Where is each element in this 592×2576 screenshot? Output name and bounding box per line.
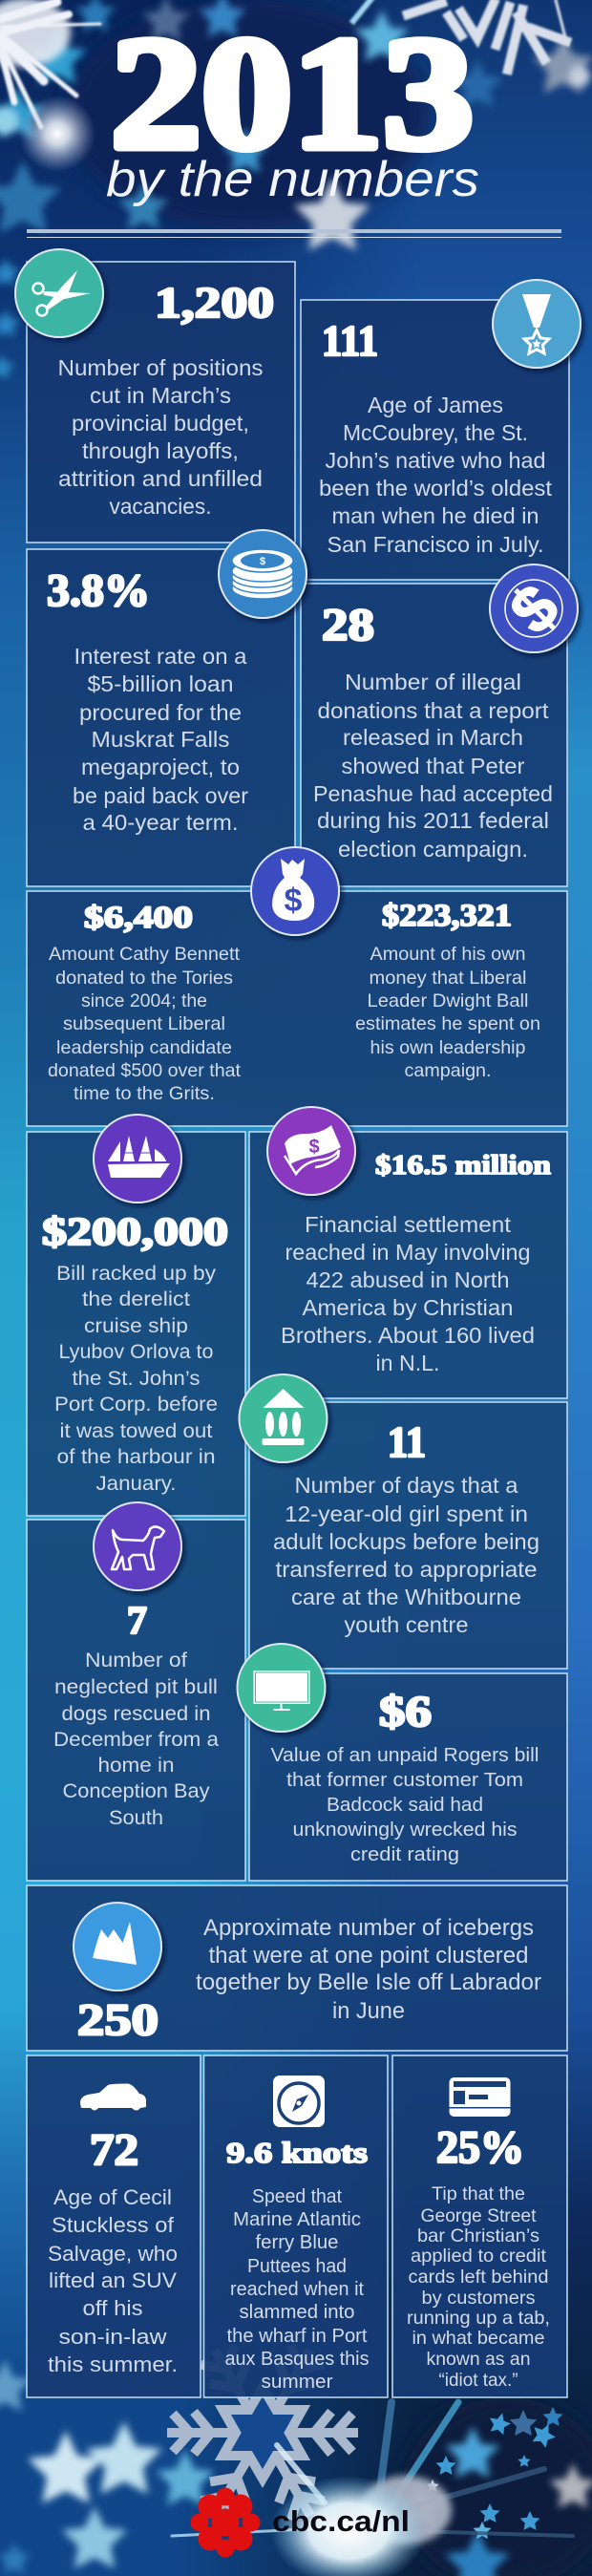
text block xyxy=(313,670,553,862)
icon: medal xyxy=(493,280,581,368)
text block: San Francisco in July. xyxy=(327,532,544,557)
text block: vacancies. xyxy=(109,494,212,519)
icon: snowflake top right xyxy=(353,0,566,70)
text block xyxy=(271,1744,539,1865)
text block: Bennett: leadership candidate xyxy=(56,1037,232,1058)
text block: Number of days that a xyxy=(294,1473,518,1498)
icon: banknotes xyxy=(267,1107,355,1195)
text block: Ball: estimates he spent on xyxy=(355,1013,540,1034)
number: 11: 11 xyxy=(388,1417,426,1466)
number: 72: 72 xyxy=(90,2125,138,2175)
text block xyxy=(273,1473,539,1637)
text block: attrition and unfilled xyxy=(58,466,263,491)
panel: 250 icebergs xyxy=(27,1885,567,2051)
text block: Bennett: subsequent Liberal xyxy=(63,1013,225,1034)
text block xyxy=(57,355,264,519)
icon: television xyxy=(237,1644,325,1732)
icon: courthouse xyxy=(239,1374,327,1462)
text block: Conception Bay xyxy=(63,1779,210,1802)
divider rule xyxy=(27,229,561,238)
text block: Bennett: Amount Cathy Bennett xyxy=(49,944,241,965)
panel: 28 xyxy=(301,584,567,886)
text block xyxy=(407,2183,550,2391)
text block xyxy=(196,1915,541,2024)
subtitle: by the numbers xyxy=(106,152,479,207)
text block: credit rating xyxy=(350,1843,459,1865)
text block: January. xyxy=(95,1473,176,1495)
panel: $6 xyxy=(249,1673,567,1881)
text block: be paid back over xyxy=(73,783,248,808)
text block: Age of Cecil xyxy=(53,2185,172,2209)
text block: in what became xyxy=(412,2328,544,2349)
text block: it was towed out xyxy=(59,1420,213,1442)
number: 25%: 25% xyxy=(436,2122,524,2173)
text block: bar Christian’s xyxy=(417,2225,539,2246)
text block: Bill racked up by xyxy=(56,1263,217,1285)
text block: Ball: money that Liberal xyxy=(369,968,527,989)
text block: of the harbour in xyxy=(57,1446,216,1468)
text block: that former customer Tom xyxy=(286,1769,523,1791)
text block: Speed that xyxy=(252,2186,342,2207)
text block: Lyubov Orlova to xyxy=(59,1341,213,1363)
text block: donations that a report xyxy=(317,698,549,723)
icon: credit card xyxy=(449,2077,510,2117)
number: 1,200: 1,200 xyxy=(155,278,274,327)
text block: McCoubrey, the St. xyxy=(343,420,528,445)
text block: showed that Peter xyxy=(342,754,525,778)
icon: ice burst top left xyxy=(0,0,100,172)
text block: Bennett: donated to the Tories xyxy=(55,968,233,989)
text block: through layoffs, xyxy=(82,438,239,463)
panel: leadership money xyxy=(27,891,567,1126)
text block xyxy=(281,1212,535,1375)
text block: man when he died in xyxy=(332,503,539,528)
text block: Port Corp. before xyxy=(54,1394,218,1416)
text block: Age of James xyxy=(368,393,503,417)
text block: $5-billion loan xyxy=(88,671,233,696)
text block: Bennett xyxy=(48,944,242,1104)
text block: Ball: Amount of his own xyxy=(370,944,525,965)
text block: Bennett: donated $500 over that xyxy=(48,1060,242,1081)
text block: ferry Blue xyxy=(256,2232,338,2253)
text block: Financial settlement xyxy=(305,1212,512,1237)
text block: in June xyxy=(332,1998,405,2024)
text block: running up a tab, xyxy=(407,2308,550,2329)
background stars: top xyxy=(0,0,592,378)
number: $6,400: $6,400 xyxy=(84,901,193,935)
number: $6: $6 xyxy=(379,1687,432,1735)
text block: Marine Atlantic xyxy=(233,2209,361,2230)
number: 3.8%: 3.8% xyxy=(47,565,150,616)
text block: Ball: Leader Dwight Ball xyxy=(367,990,529,1011)
text block: Approximate number of icebergs xyxy=(203,1915,534,1941)
text block: during his 2011 federal xyxy=(317,808,549,833)
text block: Ball: his own leadership xyxy=(370,1037,526,1058)
text block: megaproject, to xyxy=(81,755,240,779)
logo: CBC gem xyxy=(191,2487,260,2558)
text block xyxy=(225,2186,369,2393)
panel: 111 xyxy=(301,300,569,580)
icon: coins xyxy=(219,530,307,618)
text block: in N.L. xyxy=(376,1351,439,1375)
icon: bottom burst xyxy=(172,2402,573,2576)
text block: Stuckless of xyxy=(52,2213,175,2237)
text block: Brothers. About 160 lived xyxy=(281,1323,535,1348)
text block: Number of illegal xyxy=(345,670,521,694)
text block: off his xyxy=(82,2296,143,2320)
text block: together by Belle Isle off Labrador xyxy=(196,1969,541,1995)
text block: cut in March’s xyxy=(90,383,231,408)
text block: George Street xyxy=(420,2205,537,2226)
icon: money bag xyxy=(251,847,339,935)
panel: 72 xyxy=(27,2055,201,2397)
icon: scissors xyxy=(15,249,103,337)
number: $223,321: $223,321 xyxy=(382,899,512,933)
text block: adult lockups before being xyxy=(273,1529,539,1554)
text block: that were at one point clustered xyxy=(208,1943,529,1969)
text block: Tip that the xyxy=(432,2183,525,2204)
icon: small stars bottom right xyxy=(426,2407,562,2539)
text block xyxy=(54,1263,218,1495)
text block: the derelict xyxy=(82,1288,190,1310)
text block: John’s native who had xyxy=(325,448,546,473)
text block: Muskrat Falls xyxy=(92,727,229,752)
text block: Penashue had accepted xyxy=(313,781,553,806)
panel: 9.6 knots xyxy=(204,2055,388,2397)
text block: reached when it xyxy=(230,2279,364,2300)
panel: $200,000 xyxy=(27,1132,245,1516)
text block: 422 abused in North xyxy=(306,1267,510,1292)
text block: this summer. xyxy=(48,2352,178,2376)
text block: the St. John’s xyxy=(73,1368,201,1390)
text block: December from a xyxy=(53,1728,219,1751)
text block: transferred to appropriate xyxy=(275,1557,537,1582)
text block: slammed into xyxy=(239,2302,355,2323)
text block: Bennett: time to the Grits. xyxy=(74,1083,215,1104)
number: 9.6 knots: 9.6 knots xyxy=(226,2136,368,2169)
text block: Number of positions xyxy=(57,355,264,380)
text block: “idiot tax.” xyxy=(439,2370,518,2391)
title: 2013: 2013 xyxy=(111,5,474,182)
panel: 25% xyxy=(392,2055,567,2397)
text block xyxy=(53,1649,219,1829)
text block: by customers xyxy=(422,2288,536,2309)
text block: the wharf in Port xyxy=(227,2326,368,2347)
text block: 12-year-old girl spent in xyxy=(285,1501,528,1526)
text block: son-in-law xyxy=(59,2325,167,2349)
panel: 1,200 positions xyxy=(27,262,295,543)
text block: aux Basques this xyxy=(225,2349,369,2370)
icon: large snowflake bottom xyxy=(167,2339,358,2526)
icon: compass xyxy=(273,2076,325,2127)
number: $200,000: $200,000 xyxy=(42,1209,228,1253)
text block: provincial budget, xyxy=(72,411,249,436)
text block: Ball: campaign. xyxy=(405,1060,491,1081)
text block: election campaign. xyxy=(338,837,528,862)
text block: home in xyxy=(97,1754,174,1777)
panel: 11 days xyxy=(249,1402,567,1669)
text block: neglected pit bull xyxy=(54,1675,218,1698)
text block: Salvage, who xyxy=(48,2242,178,2266)
logo text: cbc.ca/nl xyxy=(272,2504,410,2538)
text block xyxy=(319,393,553,557)
text block: Value of an unpaid Rogers bill xyxy=(271,1744,539,1766)
number: 250: 250 xyxy=(77,1995,159,2045)
text block: youth centre xyxy=(344,1612,468,1637)
panel: 3.8% xyxy=(27,549,295,886)
text block: released in March xyxy=(343,725,523,750)
number: 7: 7 xyxy=(127,1598,147,1642)
text block: summer xyxy=(262,2372,333,2393)
text block: Badcock said had xyxy=(327,1794,483,1816)
title xyxy=(106,5,479,207)
text block: lifted an SUV xyxy=(49,2268,177,2292)
text block: Ball xyxy=(355,944,540,1081)
icon: dollar sign in ring: $ xyxy=(496,570,573,648)
icon: coins: $ xyxy=(260,556,265,567)
text block: Interest rate on a xyxy=(74,644,247,669)
text block: reached in May involving xyxy=(285,1240,531,1265)
panel: $16.5 million xyxy=(249,1132,567,1398)
text block: Puttees had xyxy=(247,2256,347,2277)
text block: a 40-year term. xyxy=(82,810,239,835)
text block xyxy=(73,644,248,835)
text block: cruise ship xyxy=(84,1315,188,1337)
text block: been the world’s oldest xyxy=(319,476,553,500)
icon: banknotes: $ xyxy=(308,1137,320,1158)
text block: Bennett: since 2004; the xyxy=(81,990,207,1011)
icon: money bag: $ xyxy=(285,883,303,919)
text block xyxy=(48,2185,178,2376)
text block: applied to credit xyxy=(411,2246,547,2267)
text block: unknowingly wrecked his xyxy=(292,1819,518,1841)
number: $16.5 million: $16.5 million xyxy=(375,1150,551,1181)
text block: care at the Whitbourne xyxy=(291,1585,521,1609)
text block: dogs rescued in xyxy=(61,1702,210,1725)
text block: procured for the xyxy=(79,700,242,725)
number: 28: 28 xyxy=(322,600,374,650)
icon: car xyxy=(80,2084,146,2111)
icon: ship xyxy=(94,1115,181,1203)
text block: cards left behind xyxy=(409,2267,548,2288)
icon: dog xyxy=(94,1502,181,1590)
text block: America by Christian xyxy=(302,1295,514,1320)
background stars: bottom xyxy=(0,2359,592,2576)
text block: known as an xyxy=(426,2349,531,2370)
panel: 7 dogs xyxy=(27,1520,245,1881)
number: 111: 111 xyxy=(322,316,378,365)
icon: iceberg xyxy=(74,1903,161,1991)
text block: Number of xyxy=(85,1649,187,1671)
text block: South xyxy=(109,1806,163,1829)
